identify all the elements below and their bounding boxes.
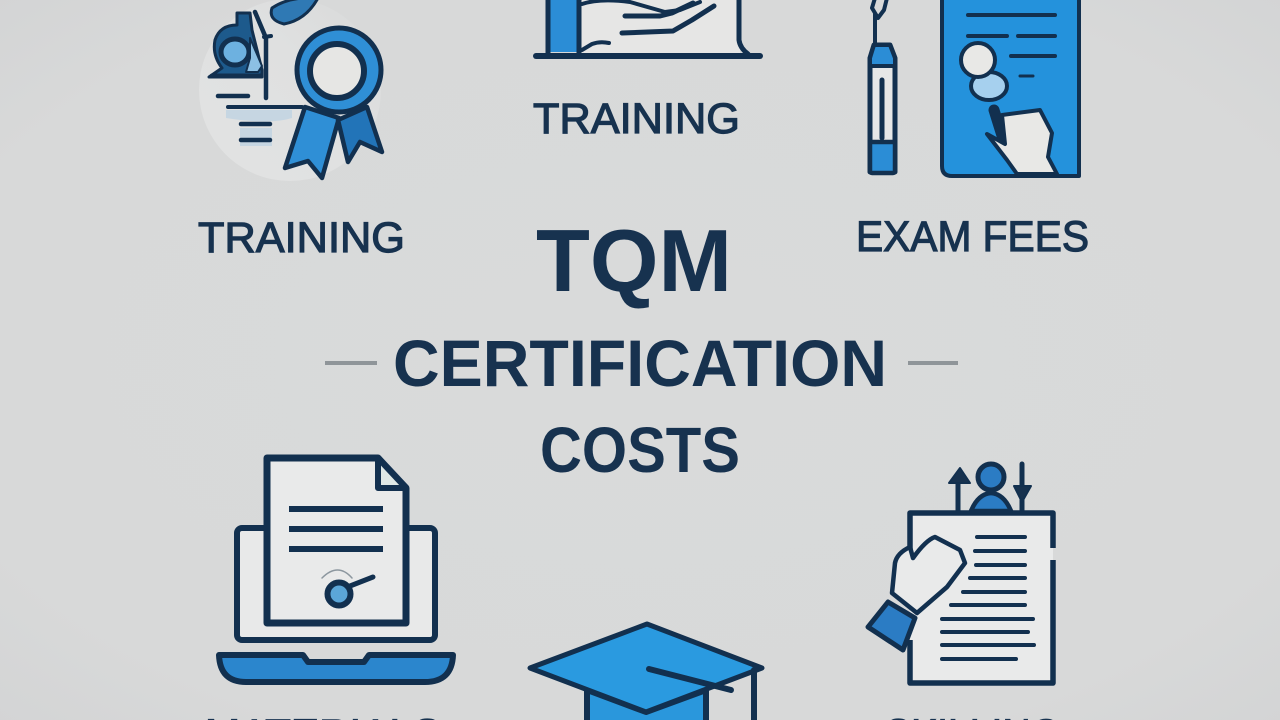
title: certification with side rules: CERTIFICATION bbox=[393, 326, 887, 400]
title: costs: COSTS bbox=[540, 414, 740, 486]
icon: hand on book bbox=[536, 0, 760, 56]
icon: training ribbon bbox=[199, 0, 382, 181]
label: training top: TRAINING bbox=[533, 95, 740, 143]
title: TQM: TQM bbox=[536, 211, 732, 310]
label: training left: TRAINING bbox=[198, 214, 405, 262]
label: exam fees: EXAM FEES bbox=[856, 213, 1089, 261]
icon: laptop with document bbox=[219, 458, 453, 682]
icon: graduation cap bbox=[530, 624, 762, 720]
icon: exam document with hand bbox=[942, 0, 1079, 176]
icon: pen bbox=[870, 0, 895, 173]
icon: contract with hand and person bbox=[868, 464, 1053, 683]
